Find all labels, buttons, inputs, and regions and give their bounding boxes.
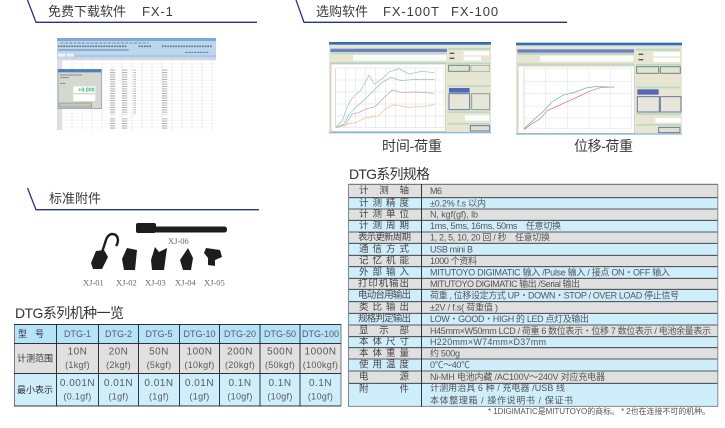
- table: specifications: 电源: [359, 371, 409, 383]
- table: model list: (20kgf): [225, 360, 255, 370]
- screenshot: FX-1 spreadsheet: +0.000: [78, 88, 95, 94]
- screenshot: time-load chart: [329, 42, 491, 133]
- table: specifications: 本体重量: [359, 347, 409, 359]
- heading: optional software: 选购软件: [316, 4, 368, 19]
- table: model list: DTG-10: [183, 329, 216, 339]
- table: specifications: 1, 2, 5, 10, 20 回 / 秒 任意切换: [430, 232, 550, 243]
- table: model list: (100kgf): [303, 360, 338, 370]
- table: specifications: 外部输入: [359, 266, 409, 278]
- table: model list: 0.1N: [268, 378, 292, 389]
- table: specifications: H45mm×W50mm LCD / 荷重 6 数位表示・位移 7 数位表示 / 电池余量表示: [430, 325, 711, 336]
- table: specifications: 计测轴: [359, 184, 409, 196]
- table: model list: (1gf): [189, 392, 210, 402]
- table: specifications: 显示部: [359, 324, 409, 336]
- table: specifications: 打印机输出: [358, 277, 409, 289]
- screenshot: displacement-load chart: [516, 43, 682, 135]
- accessories photo: XJ-04: [175, 278, 197, 288]
- table: specifications: 本体整理箱 / 操作说明书 / 保证书: [430, 394, 573, 406]
- heading: model list: DTG系列机种一览: [15, 305, 124, 321]
- table: model list: 10N: [68, 346, 87, 358]
- right panel: [448, 48, 490, 50]
- table: model list: (0.1gf): [63, 392, 92, 402]
- table: specifications: 荷重 , 位移设定方式 UP・DOWN・STOP / OVER LOAD 停止信号: [430, 290, 679, 300]
- table: model list: DTG-5: [146, 329, 172, 339]
- table: specifications: N, kgf(gf), lb: [430, 210, 478, 220]
- table: specifications: 附件: [359, 383, 409, 395]
- table: specifications: ±2V / f.s( 荷重值 ): [430, 302, 498, 312]
- dialog: [58, 69, 101, 109]
- table: model list: 计测范围: [17, 352, 53, 364]
- table: model list: (1kgf): [65, 360, 90, 370]
- grip XJ-04: [180, 248, 193, 270]
- table: model list: 50N: [149, 346, 169, 358]
- table: model list: (1gf): [149, 392, 169, 402]
- accessories photo: XJ-01: [83, 278, 104, 288]
- table: model list: (10gf): [267, 392, 293, 402]
- table: model list: 100N: [187, 346, 212, 358]
- accessories photo: XJ-05: [204, 278, 225, 288]
- table: specifications: 1000 个资料: [430, 255, 477, 266]
- grip XJ-02: [122, 248, 137, 270]
- table: model list: (5kgf): [147, 360, 171, 370]
- heading: optional software: [296, 0, 567, 22]
- table: model list: (1gf): [108, 392, 129, 402]
- table: specifications: 规格判定输出: [358, 313, 411, 325]
- table: model list: 0.01N: [104, 378, 133, 389]
- table: specifications: M6: [430, 186, 442, 196]
- table: model list: 0.01N: [185, 378, 214, 389]
- table: specifications: USB mini B: [430, 244, 473, 254]
- table: model list: 0.001N: [60, 378, 95, 389]
- heading: optional software: FX-100T: [383, 4, 440, 19]
- table: specifications: MITUTOYO DIGIMATIC 输入 /Pulse 输入 / 接点 ON・OFF 输入: [430, 266, 670, 278]
- accessories photo: XJ-02: [116, 278, 137, 288]
- table: model list: [14, 324, 341, 406]
- heading: free software: [28, 0, 257, 22]
- table: specifications: 电动台用输出: [358, 289, 411, 301]
- heading: optional software: FX-100: [451, 4, 499, 19]
- table: specifications: ±0.2% f.s 以内: [430, 198, 486, 208]
- table: specifications: LOW・GOOD・HIGH 的 LED 点灯及输出: [430, 313, 589, 324]
- accessories photo: XJ-03: [145, 278, 166, 288]
- table: specifications: 表示更新周期: [358, 231, 411, 243]
- table: specifications: [348, 184, 718, 407]
- table: model list: DTG-2: [105, 329, 132, 339]
- table: model list: 500N: [267, 346, 293, 358]
- accessories photo: XJ-06: [168, 236, 189, 246]
- heading: specifications: DTG系列规格: [349, 166, 430, 182]
- table: specifications: H220mm×W74mm×D37mm: [430, 337, 546, 347]
- caption: time-load: 时间-荷重: [382, 138, 442, 154]
- table: specifications: 本体尺寸: [359, 336, 409, 348]
- table: model list: (10kgf): [184, 360, 215, 370]
- heading: standard accessories: 标准附件: [49, 191, 101, 206]
- table: model list: 200N: [227, 346, 253, 358]
- table: specifications: 通信方式: [359, 243, 409, 255]
- table: model list: 0.01N: [144, 378, 174, 389]
- table: model list: 0.1N: [309, 378, 332, 389]
- table: specifications: MITUTOYO DIGIMATIC 输出 /Serial 输出: [430, 278, 580, 289]
- caption: displacement-load: 位移-荷重: [574, 138, 633, 154]
- footnote: * 1DIGIMATIC是MITUTOYO的商标。 * 2也在连接不可的机种。: [488, 406, 710, 416]
- table: model list: (50kgf): [265, 360, 295, 370]
- table: specifications: 1ms, 5ms, 16ms, 50ms 任意切换: [430, 220, 561, 231]
- screenshot: FX-1 spreadsheet: [57, 38, 216, 130]
- table: specifications: 计测周期: [359, 220, 409, 232]
- cap XJ-05: [204, 248, 222, 266]
- table: model list: DTG-100: [302, 329, 339, 339]
- table: specifications: 类比输出: [359, 301, 409, 313]
- table: model list: 0.1N: [228, 378, 252, 389]
- hook XJ-01: [91, 234, 118, 269]
- heading: standard accessories: [28, 188, 259, 210]
- table: specifications: 记忆机能: [359, 254, 409, 266]
- table: model list: DTG-1: [64, 329, 91, 339]
- table: model list: (10gf): [227, 392, 253, 402]
- grip XJ-03: [151, 247, 167, 270]
- heading: free software: FX-1: [142, 4, 174, 19]
- table: model list: DTG-50: [264, 329, 296, 339]
- table: model list: (10gf): [308, 392, 333, 402]
- rod XJ-06: [136, 223, 227, 233]
- table: specifications: 计测单位: [359, 208, 409, 220]
- table: specifications: 约 500g: [430, 347, 460, 358]
- table: specifications: 使用温度: [359, 358, 409, 370]
- accessories photo: [83, 223, 227, 288]
- table: model list: DTG-20: [224, 329, 256, 339]
- table: model list: 最小表示: [17, 384, 53, 395]
- right panel: [636, 49, 681, 51]
- table: specifications: 计测精度: [359, 197, 409, 209]
- table: specifications: 0℃～40℃: [430, 360, 470, 370]
- table: specifications: Ni-MH 电池内藏 /AC100V～240V 对应充电器: [430, 371, 605, 382]
- table: model list: 型号: [18, 329, 52, 339]
- table: specifications: 计测用治具 6 种 / 充电器 /USB 线: [430, 382, 565, 393]
- table: model list: 1000N: [305, 346, 336, 358]
- heading: free software: 免费下载软件: [48, 4, 126, 19]
- table: model list: (2kgf): [106, 360, 131, 370]
- table: model list: 20N: [109, 346, 128, 358]
